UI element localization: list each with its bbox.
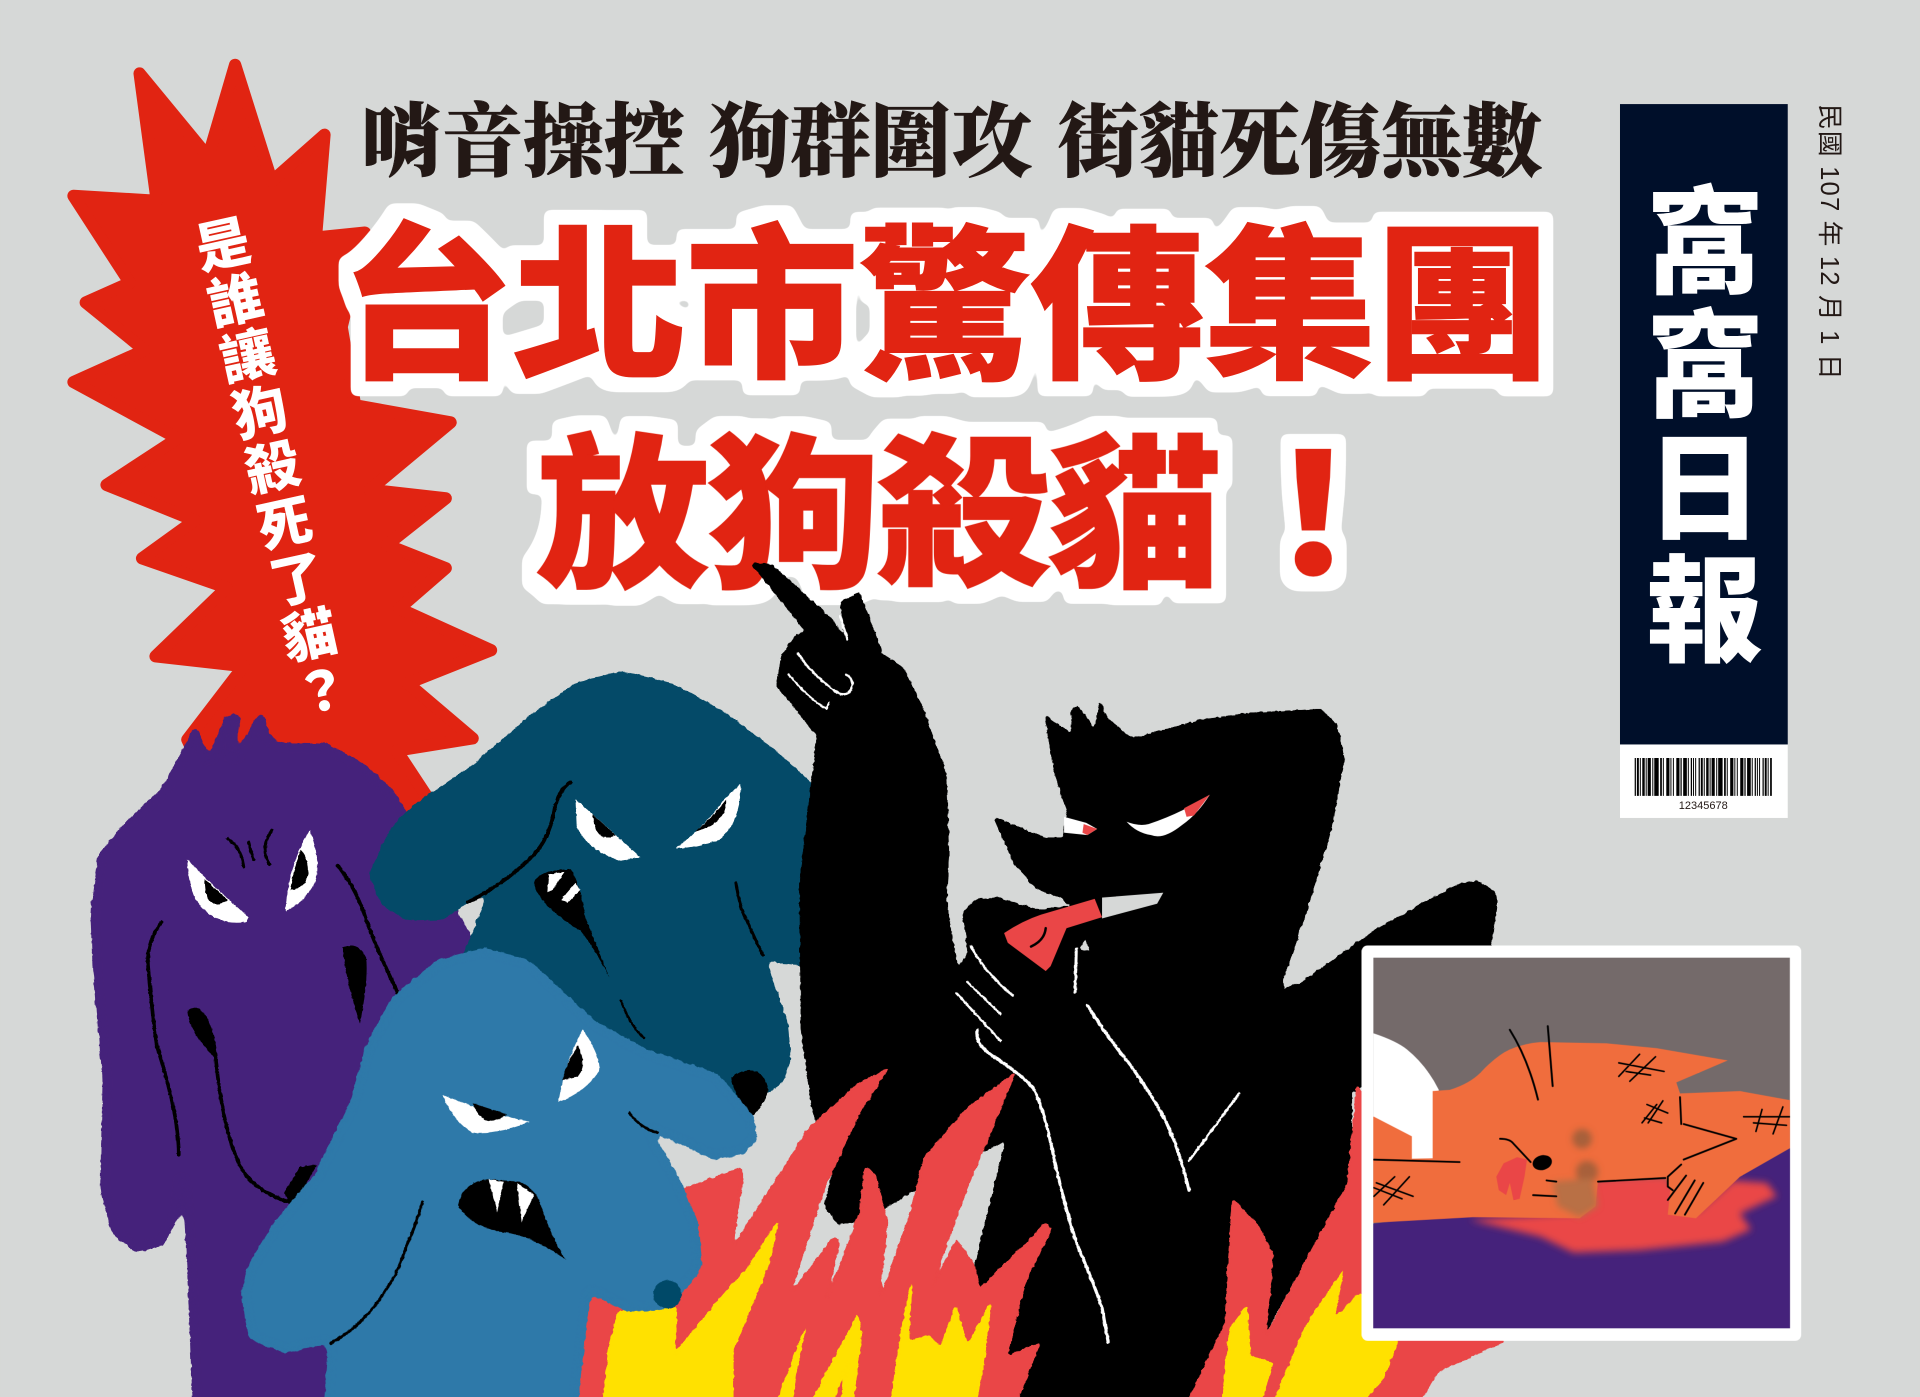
barcode: 12345678 bbox=[1679, 800, 1728, 812]
blue dog bbox=[241, 948, 757, 1397]
black villain bbox=[751, 563, 1498, 1397]
teal dog bbox=[369, 671, 833, 1119]
villain white contour lines bbox=[789, 616, 1239, 1342]
blood pool bbox=[1469, 1175, 1777, 1253]
masthead name bbox=[1646, 179, 1763, 678]
orange cat body bbox=[1365, 1042, 1800, 1223]
whistle bbox=[1004, 899, 1102, 971]
left flames yellow core bbox=[601, 1217, 992, 1397]
masthead name: 日 bbox=[1646, 425, 1763, 555]
date line: 民國 107 年 12 月 1 日 bbox=[1815, 104, 1844, 380]
left flames bbox=[576, 1067, 1052, 1397]
blue dog nose bbox=[653, 1280, 681, 1308]
blue dog face bbox=[331, 1030, 681, 1343]
inset scene bbox=[1365, 958, 1800, 1335]
teal dog face bbox=[468, 782, 768, 1119]
blurred wounds bbox=[1553, 1129, 1598, 1217]
subheadline: 狗群圍攻 bbox=[709, 99, 1032, 188]
purple dog face bbox=[148, 830, 398, 1209]
subheadline bbox=[361, 99, 1543, 188]
red starburst bbox=[73, 65, 491, 857]
masthead bbox=[1620, 104, 1788, 818]
cat tongue bbox=[1496, 1157, 1527, 1200]
masthead name: 窩 bbox=[1646, 179, 1763, 309]
cat foreleg bbox=[1373, 1116, 1412, 1163]
villain mouth bbox=[1102, 893, 1163, 918]
barcode bbox=[1620, 744, 1788, 818]
white surface bbox=[1373, 1033, 1440, 1159]
subheadline: 街貓死傷無數 bbox=[1058, 99, 1543, 188]
cat nose bbox=[1532, 1154, 1552, 1170]
purple floor bbox=[1365, 1142, 1800, 1335]
starburst slogan: 是誰讓狗殺死了貓？ bbox=[182, 211, 354, 727]
inset: dead cat bbox=[1362, 945, 1801, 1341]
villain eyes bbox=[1064, 795, 1210, 836]
masthead name: 窩 bbox=[1646, 303, 1763, 433]
subheadline: 哨音操控 bbox=[361, 99, 684, 188]
main title bbox=[340, 215, 1549, 609]
cat lines bbox=[1374, 1026, 1790, 1215]
masthead name: 報 bbox=[1646, 548, 1763, 678]
teal dog nose bbox=[731, 1070, 768, 1119]
villain head bbox=[993, 699, 1344, 1010]
right flames yellow core bbox=[1220, 1267, 1398, 1397]
main title: 台北市驚傳集團 bbox=[340, 215, 1549, 400]
purple dog bbox=[91, 708, 490, 1397]
right flames bbox=[1178, 1084, 1505, 1397]
main title: 放狗殺貓！ bbox=[536, 424, 1400, 609]
